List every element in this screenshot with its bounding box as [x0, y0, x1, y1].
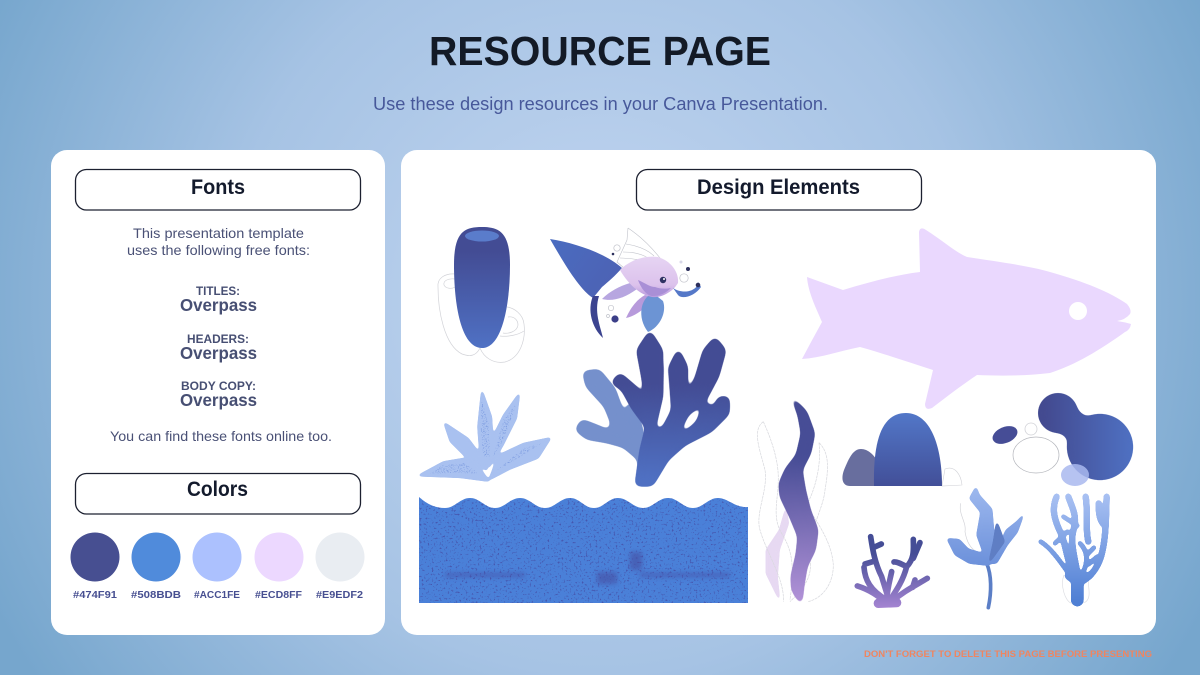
color swatch: E9EDF2: #E9EDF2	[316, 589, 363, 601]
icon: tall seaweed	[757, 393, 833, 607]
text block: fonts online: You can find these fonts online too.	[110, 428, 332, 444]
heading: design elements: Design Elements	[697, 176, 860, 199]
title: RESOURCE PAGE	[429, 28, 771, 74]
icon: pebbles blob	[990, 393, 1133, 486]
text block: body copy font: Overpass	[180, 390, 257, 410]
panel: design elements	[401, 150, 1156, 635]
color swatch: 474F91	[70, 532, 120, 601]
color swatch: 508BDB	[131, 532, 181, 601]
color swatch: 508BDB: #508BDB	[131, 589, 181, 601]
icon: goldfish	[550, 228, 701, 338]
subtitle: Use these design resources in your Canva Presentation.	[373, 94, 828, 114]
icon: branching tree coral	[1041, 497, 1107, 603]
heading: fonts	[76, 170, 360, 210]
icon: rocks	[842, 413, 962, 486]
text block: titles font	[180, 284, 257, 315]
icon: large coral	[575, 330, 729, 486]
heading: colors	[76, 474, 360, 514]
icon: sponge vase	[438, 227, 524, 362]
text block: font intro: This presentation template	[133, 225, 304, 241]
color swatch: ACC1FE	[192, 532, 242, 601]
icon: big fish silhouette	[802, 228, 1131, 409]
color swatch: 474F91: #474F91	[73, 589, 117, 601]
text block: font intro: uses the following free fonts:	[127, 242, 310, 258]
icon: small coral	[857, 537, 927, 603]
text block: body copy font: BODY COPY:	[181, 379, 256, 393]
footer note: DON'T FORGET TO DELETE THIS PAGE BEFORE PRESENTING	[864, 649, 1152, 659]
text block: titles font: Overpass	[180, 295, 257, 315]
panel: fonts and colors	[51, 150, 385, 635]
heading: fonts: Fonts	[191, 176, 245, 199]
text block: titles font: TITLES:	[196, 284, 240, 298]
icon: agave plant	[417, 388, 552, 482]
color swatch: ECD8FF	[254, 532, 304, 601]
text block: headers font	[180, 332, 257, 363]
text block: headers font: Overpass	[180, 343, 257, 363]
heading: design elements	[636, 170, 922, 210]
text block: headers font: HEADERS:	[187, 332, 249, 346]
color swatch: E9EDF2	[316, 532, 364, 601]
color swatch: ACC1FE: #ACC1FE	[194, 589, 240, 601]
heading: colors: Colors	[187, 478, 248, 501]
icon: textured water wave	[419, 497, 748, 603]
text block: body copy font	[180, 379, 257, 410]
text block: font intro	[127, 225, 310, 258]
color swatch: ECD8FF: #ECD8FF	[255, 589, 303, 601]
icon: blue kelp	[947, 486, 1025, 608]
